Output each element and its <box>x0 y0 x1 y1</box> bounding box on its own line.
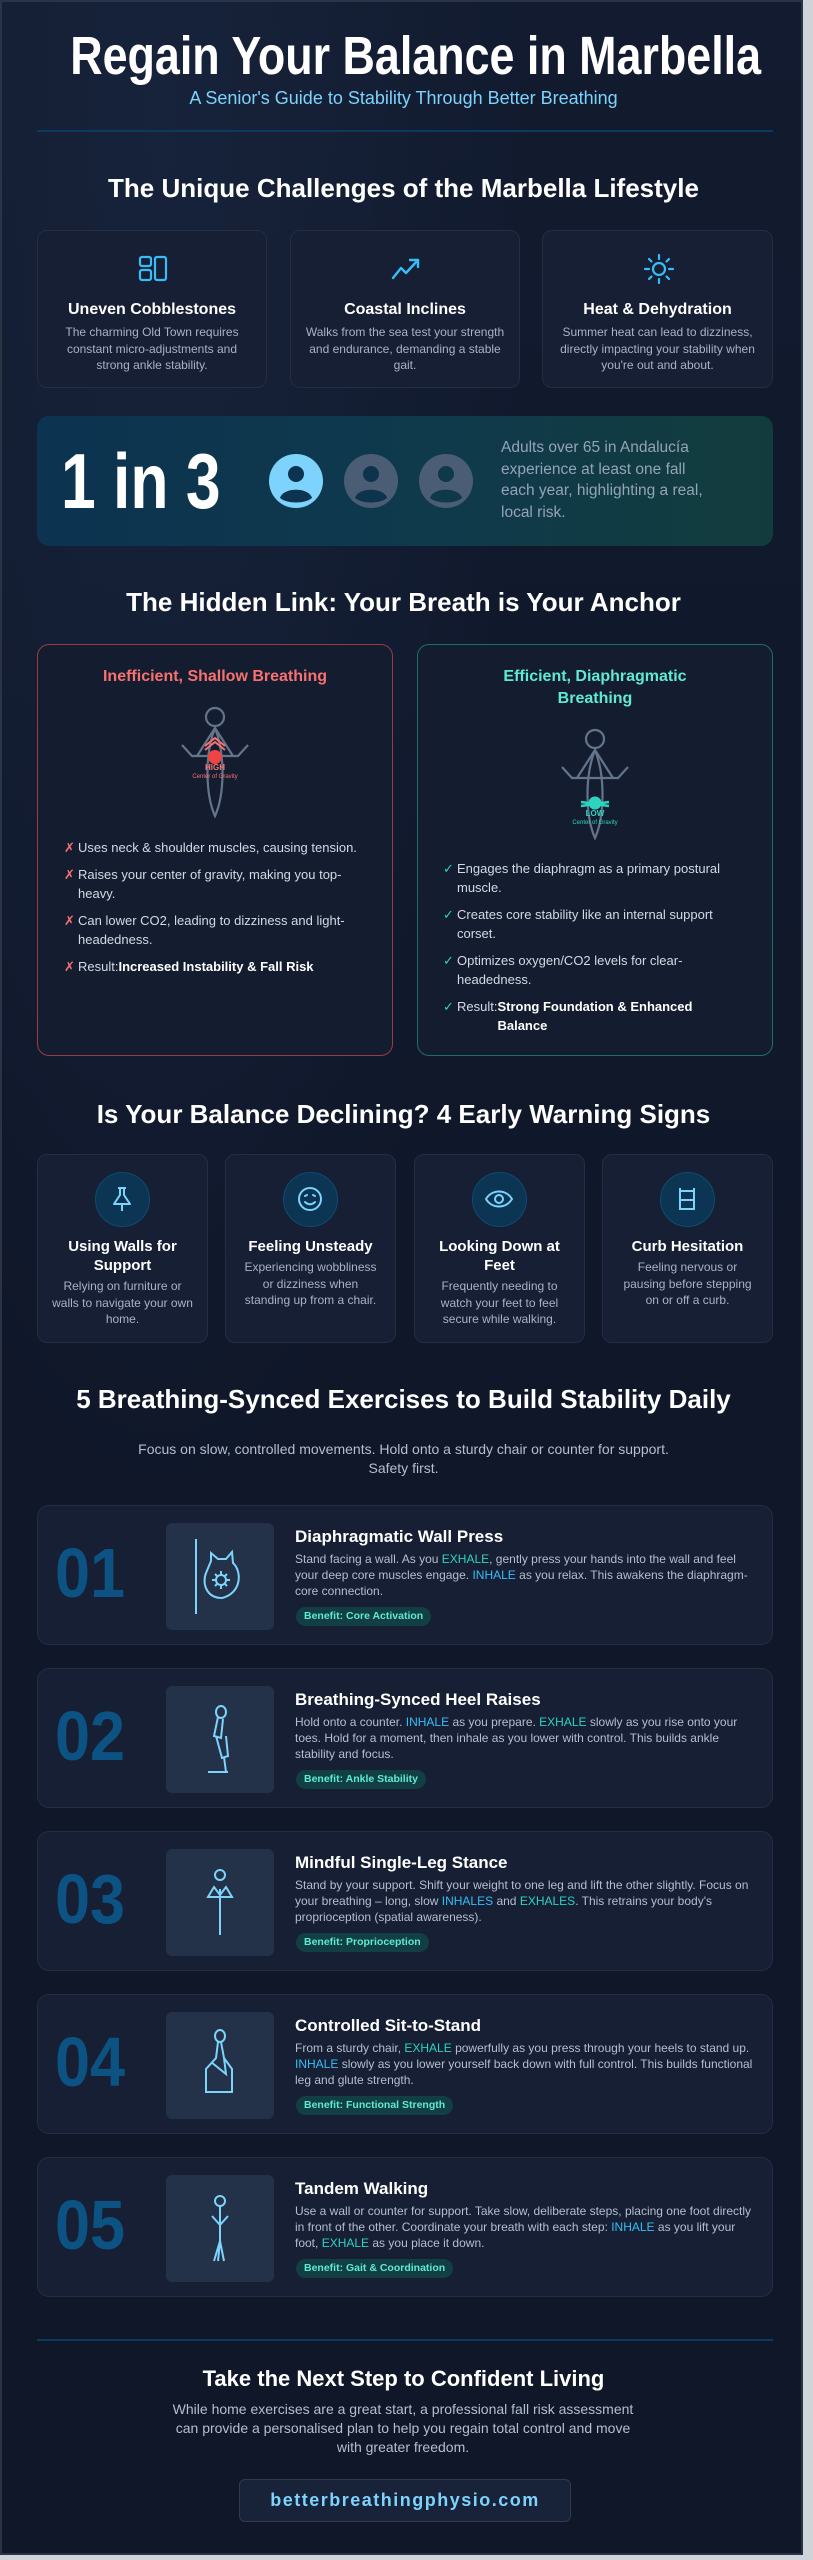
card: looking down: Frequently needing to watch your feet to feel secure while walking. <box>441 1279 558 1326</box>
exercise 04: Benefit: Functional Strength <box>304 2099 445 2111</box>
exercise 02: Benefit: Ankle Stability <box>304 1773 418 1785</box>
footer heading: Take the Next Step to Confident Living <box>203 2366 604 2391</box>
exercise 04: 04 <box>55 2023 125 2101</box>
figure: high center of gravity: HIGH <box>205 763 225 772</box>
exercise 03: Mindful Single-Leg Stance <box>295 1853 508 1872</box>
list: benefits <box>443 861 720 1033</box>
card: heat: Heat & Dehydration <box>583 301 732 318</box>
exercise 01: Benefit: Core Activation <box>304 1610 423 1622</box>
exercise 03: Benefit: Proprioception <box>304 1936 421 1948</box>
icon: tandem walking <box>166 2175 274 2282</box>
card: looking down: Looking Down at Feet <box>439 1238 560 1274</box>
card: inclines: Coastal Inclines <box>344 301 466 318</box>
panel: shallow breathing <box>37 644 393 1056</box>
card: heat <box>542 230 773 388</box>
footer text: with greater freedom. <box>337 2439 469 2455</box>
exercise 02: Breathing-Synced Heel Raises <box>295 1690 541 1709</box>
icon: trend up <box>392 258 420 280</box>
card: cobblestones: Uneven Cobblestones <box>68 301 236 318</box>
list: drawbacks: Raises your center of gravity, making you top-heavy. <box>78 867 342 901</box>
card: unsteady: Feeling Unsteady <box>248 1238 373 1255</box>
icon: single leg stance <box>166 1849 274 1956</box>
figure: low center of gravity: Center of Gravity <box>572 820 618 826</box>
footer text: can provide a personalised plan to help you regain total control and move <box>176 2420 630 2436</box>
exercise 05: 05 <box>55 2186 125 2264</box>
heading: warning signs: Is Your Balance Declining? 4 Early Warning Signs <box>97 1099 710 1129</box>
figure: high center of gravity <box>181 706 249 818</box>
heading: hidden link: The Hidden Link: Your Breath is Your Anchor <box>126 587 681 617</box>
exercise 03 <box>37 1831 773 1971</box>
card: unsteady: Experiencing wobbliness or dizziness when standing up from a chair. <box>244 1260 377 1307</box>
exercise 02: Hold onto a counter. INHALE as you prepare. EXHALE slowly as you rise onto your toes. Hold for a moment, then inhale as you lower with control. This builds ankle stability and focus. <box>295 1715 737 1761</box>
heading: challenges: The Unique Challenges of the Marbella Lifestyle <box>108 173 699 203</box>
footer text: While home exercises are a great start, a professional fall risk assessment <box>173 2401 633 2417</box>
exercise 01 <box>37 1505 773 1645</box>
list: benefits: Engages the diaphragm as a primary postural muscle. <box>457 861 720 895</box>
subtitle: A Senior's Guide to Stability Through Better Breathing <box>189 88 618 108</box>
exercise 05: Benefit: Gait & Coordination <box>304 2262 445 2274</box>
exercise 05 <box>37 2157 773 2297</box>
list: drawbacks: Increased Instability & Fall Risk <box>118 959 314 974</box>
card: walls: Relying on furniture or walls to navigate your own home. <box>52 1279 193 1326</box>
exercise 05: Tandem Walking <box>295 2179 428 2198</box>
panel title: Efficient, Diaphragmatic Breathing <box>503 668 687 707</box>
card: curb <box>602 1154 773 1343</box>
card: looking down <box>414 1154 585 1343</box>
stat text: Adults over 65 in Andalucía <box>501 439 689 456</box>
list: drawbacks: Can lower CO2, leading to dizziness and light-headedness. <box>78 913 345 947</box>
panel title: Inefficient, Shallow Breathing <box>103 668 327 685</box>
list: drawbacks <box>64 840 357 974</box>
list: drawbacks: ✗ <box>64 867 75 882</box>
list: benefits: ✓ <box>443 861 454 876</box>
exercise 02 <box>37 1668 773 1808</box>
button: website <box>239 2479 571 2522</box>
list: benefits: Optimizes oxygen/CO2 levels for clear-headedness. <box>457 953 682 987</box>
exercise 01: Stand facing a wall. As you EXHALE, gently press your hands into the wall and feel your deep core muscles engage. INHALE as you relax. This awakens the diaphragm-core connection. <box>295 1552 748 1598</box>
stat text <box>501 439 703 520</box>
intro text: Focus on slow, controlled movements. Hold onto a sturdy chair or counter for support. Safety first. <box>138 1441 669 1476</box>
stat band <box>37 416 773 546</box>
card: inclines <box>290 230 520 388</box>
button: website: betterbreathingphysio.com <box>270 2490 540 2510</box>
stat text: local risk. <box>501 504 566 520</box>
icons: people <box>269 454 473 508</box>
heading: exercises: 5 Breathing-Synced Exercises to Build Stability Daily <box>76 1384 731 1414</box>
list: drawbacks: ✗ <box>64 840 75 855</box>
list: drawbacks: Uses neck & shoulder muscles, causing tension. <box>78 840 357 855</box>
title: Regain Your Balance in Marbella <box>70 26 761 86</box>
card: inclines: Walks from the sea test your strength and endurance, demanding a stable gait. <box>306 325 504 372</box>
figure: high center of gravity: Center of Gravity <box>192 774 238 780</box>
card: walls <box>37 1154 208 1343</box>
figure: low center of gravity <box>561 728 629 840</box>
footer text <box>172 2401 634 2455</box>
list: benefits: ✓ <box>443 907 454 922</box>
card: cobblestones <box>37 230 267 388</box>
exercise 04: Controlled Sit-to-Stand <box>295 2016 481 2035</box>
exercise 02: 02 <box>55 1697 125 1775</box>
exercise 04: From a sturdy chair, EXHALE powerfully as you press through your heels to stand up. INHALE slowly as you lower yourself back down with full control. This builds functional leg and glute strength. <box>295 2041 752 2087</box>
stat text: each year, highlighting a real, <box>501 482 703 499</box>
card: curb: Curb Hesitation <box>632 1238 743 1255</box>
list: benefits: Strong Foundation & Enhanced Balance <box>497 999 692 1033</box>
stat number: 1 in 3 <box>61 437 221 525</box>
list: drawbacks: Result: <box>78 959 118 974</box>
figure: low center of gravity: LOW <box>586 809 605 818</box>
card: cobblestones: The charming Old Town requires constant micro-adjustments and strong ankle stability. <box>65 325 239 372</box>
icon: eye <box>472 1172 527 1227</box>
icon: wall press <box>166 1523 274 1630</box>
card: heat: Summer heat can lead to dizziness, directly impacting your stability when you're out and about. <box>560 325 755 372</box>
icon: cobblestones <box>138 256 168 282</box>
card: curb: Feeling nervous or pausing before stepping on or off a curb. <box>623 1260 752 1307</box>
list: drawbacks: ✗ <box>64 959 75 974</box>
list: benefits: Creates core stability like an internal support corset. <box>457 907 713 941</box>
panel: diaphragmatic breathing <box>417 644 773 1056</box>
icon: sun <box>644 254 674 284</box>
list: benefits: ✓ <box>443 999 454 1014</box>
icon: face <box>283 1172 338 1227</box>
exercise 03: Stand by your support. Shift your weight to one leg and lift the other slightly. Focus on your breathing – long, slow INHALES and EXHALES. This retrains your body's proprioception (spatial awareness). <box>295 1878 748 1924</box>
exercise 01: 01 <box>55 1534 125 1612</box>
list: drawbacks: ✗ <box>64 913 75 928</box>
list: benefits: Result: <box>457 999 497 1014</box>
exercise 05: Use a wall or counter for support. Take slow, deliberate steps, placing one foot directly in front of the other. Coordinate your breath with each step: INHALE as you lift your foot, EXHALE as you place it down. <box>295 2204 751 2250</box>
exercise 01: Diaphragmatic Wall Press <box>295 1527 503 1546</box>
exercise 03: 03 <box>55 1860 125 1938</box>
card: unsteady <box>225 1154 396 1343</box>
icon: support <box>95 1172 150 1227</box>
icon: ladder <box>660 1172 715 1227</box>
exercise 04 <box>37 1994 773 2134</box>
card: walls: Using Walls for Support <box>68 1238 177 1274</box>
stat text: experience at least one fall <box>501 460 685 478</box>
icon: heel raise <box>166 1686 274 1793</box>
list: benefits: ✓ <box>443 953 454 968</box>
icon: sit to stand <box>166 2012 274 2119</box>
